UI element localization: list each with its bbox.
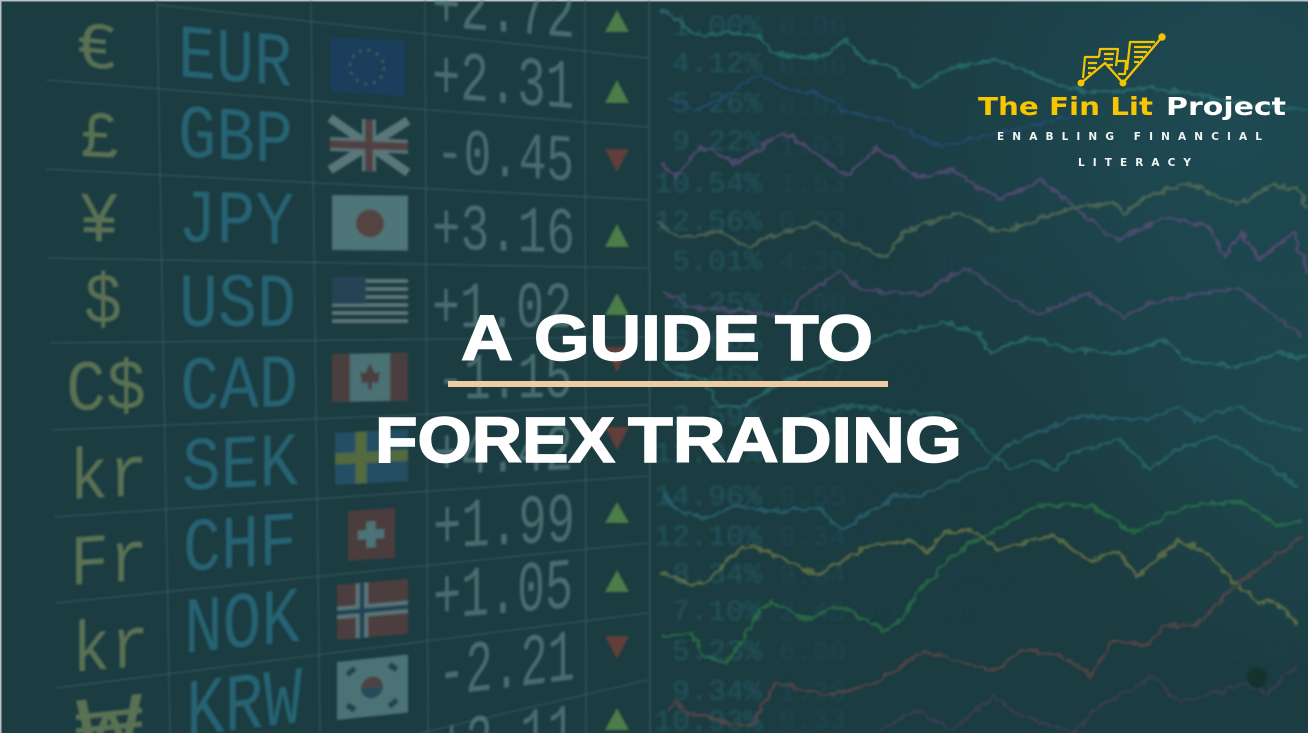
rate change values column: -0.45 — [436, 117, 574, 200]
title — [375, 302, 962, 476]
title line: Forex Trading: TRADING — [628, 404, 962, 476]
faint percentage columns: 3.12 — [860, 208, 922, 238]
faint percentage columns: 1.03 — [779, 133, 846, 164]
faint percentage columns: 5.23% — [672, 636, 763, 670]
currency symbols column — [66, 11, 149, 733]
faint percentage columns: 1.92 — [779, 403, 846, 434]
logo wordmark accent: Project — [1166, 92, 1286, 121]
flag: UK — [330, 118, 408, 173]
faint percentage columns: 1.53 — [779, 170, 846, 201]
faint percentage columns: 0.90 — [779, 13, 846, 44]
flag: USA — [332, 277, 408, 321]
faint percentage columns: 0.77 — [860, 18, 922, 48]
faint percentage columns: 12.56% — [654, 206, 763, 240]
faint percentage columns: 5.80 — [860, 483, 922, 513]
currency symbols column: € — [76, 11, 118, 90]
faint percentage columns: 6.00 — [779, 638, 846, 669]
logo tagline line 1: ENABLING FINANCIAL — [997, 131, 1262, 143]
faint percentage columns: 9.60 — [1228, 598, 1290, 628]
title line: A Guide To: TO — [775, 302, 873, 374]
faint percentage columns: 14.96% — [654, 481, 763, 515]
currency codes column: JPY — [178, 178, 294, 267]
rate change values column: +1.05 — [433, 547, 573, 641]
faint percentage columns: 0.80 — [1228, 290, 1290, 320]
faint percentage columns: 9.22% — [672, 126, 763, 160]
faint percentage columns: 9.80 — [948, 598, 1010, 628]
title line: A Guide To: A — [461, 302, 513, 374]
title line: Forex Trading — [375, 404, 962, 476]
faint percentage columns: 1.00 — [1228, 638, 1290, 668]
currency table grid — [46, 0, 650, 733]
currency codes column: NOK — [184, 575, 301, 678]
currency codes column: EUR — [178, 13, 292, 109]
faint percentage columns: 1.28 — [779, 678, 846, 709]
currency symbols column: Fr — [70, 520, 148, 607]
faint percentage columns: 7.10% — [672, 596, 763, 630]
logo: The Fin Lit Project — [978, 34, 1286, 169]
flag: Sweden — [335, 429, 408, 485]
faint percentage columns: 0.25 — [860, 290, 922, 320]
title divider — [448, 381, 888, 387]
title line: Forex Trading: FOREX — [375, 404, 615, 476]
rate change values column: +1.99 — [433, 484, 575, 570]
currency symbols column: ¥ — [79, 181, 119, 264]
faint percentage columns: 4.12% — [672, 48, 763, 82]
rate change values column: +3.16 — [432, 193, 575, 273]
flag: EU — [330, 37, 405, 96]
faint percentage columns — [657, 14, 844, 731]
rate change values column: +1.02 — [432, 272, 572, 347]
faint percentage columns: 1.00% — [672, 11, 763, 45]
flag: South Korea — [337, 655, 408, 720]
faint percentage columns: 0.90 — [948, 561, 1010, 591]
logo tagline line 2: LITERACY — [1078, 157, 1191, 169]
faint percentage columns: 0.55 — [779, 483, 846, 514]
rate change values column — [432, 0, 575, 733]
currency codes column: SEK — [182, 421, 298, 513]
currency codes column: USD — [179, 263, 296, 349]
flag: Switzerland — [348, 508, 395, 561]
faint percentage columns: 0.93 — [779, 208, 846, 239]
faint percentage columns: 12.10% — [654, 521, 763, 555]
currency codes column: CHF — [183, 500, 297, 594]
up and down arrows column — [605, 10, 629, 730]
faint percentage columns: 8.00 — [779, 290, 846, 321]
title line: A Guide To — [461, 302, 873, 374]
faint percentage columns: 5.26% — [672, 88, 763, 122]
icon: buildings with rising trend line — [1079, 34, 1165, 85]
market line charts — [658, 10, 1308, 733]
faint percentage columns: 11.04% — [654, 438, 763, 472]
faint percentage columns: 3.59% — [672, 401, 763, 435]
faint percentage columns: 4.30 — [779, 248, 846, 279]
faint percentage columns: 0.59 — [860, 403, 922, 433]
faint percentage columns: 6.20 — [860, 248, 922, 278]
flag: Norway — [337, 579, 408, 640]
faint percentage columns: 9.34% — [672, 676, 763, 710]
faint percentage columns: 0.77 — [779, 363, 846, 394]
faint percentage columns: 2.45 — [779, 598, 846, 629]
currency codes column — [178, 13, 302, 733]
faint percentage columns: 8.34% — [672, 559, 763, 593]
currency symbols column: C$ — [66, 349, 146, 432]
rate change values column: -1.15 — [437, 342, 572, 419]
faint percentage columns: 0.60 — [860, 170, 922, 200]
faint percentage columns: 10.54% — [654, 168, 763, 202]
currency symbols column: kr — [72, 605, 149, 694]
faint percentage columns: 0.90 — [779, 53, 846, 84]
currency symbols column: kr — [69, 435, 148, 521]
faint percentage columns: 6.68% — [672, 326, 763, 360]
faint percentage columns: 4.25% — [672, 288, 763, 322]
flag: Japan — [332, 195, 408, 251]
faint percentage columns: 3.46% — [672, 361, 763, 395]
currency codes column: CAD — [180, 343, 298, 432]
faint percentage columns: 0.92 — [779, 93, 846, 124]
faint percentage columns: 9.00 — [860, 598, 922, 628]
flag: Canada — [332, 353, 408, 402]
logo wordmark: The Fin Lit — [978, 92, 1153, 121]
faint percentage columns: 5.00 — [1228, 248, 1290, 278]
country flags column — [330, 37, 408, 720]
currency codes column: GBP — [178, 93, 293, 186]
currency symbols column: $ — [84, 263, 122, 345]
faint percentage columns: 0.90 — [948, 483, 1010, 513]
rate change values column: +4.42 — [433, 414, 573, 494]
faint percentage columns: 5.01% — [672, 246, 763, 280]
rate change values column: +2.31 — [432, 40, 574, 130]
currency symbols column: £ — [81, 101, 119, 178]
title line: A Guide To: GUIDE — [534, 302, 760, 374]
rate change values column: -2.21 — [438, 618, 575, 719]
faint percentage columns: 9.34 — [779, 561, 846, 592]
faint percentage columns: 0.34 — [779, 523, 846, 554]
faint percentage columns: 8.00 — [948, 248, 1010, 278]
faint percentage columns: 4.00 — [860, 523, 922, 553]
dark dot — [1247, 668, 1267, 688]
faint percentage columns: 9.34 — [860, 363, 922, 393]
